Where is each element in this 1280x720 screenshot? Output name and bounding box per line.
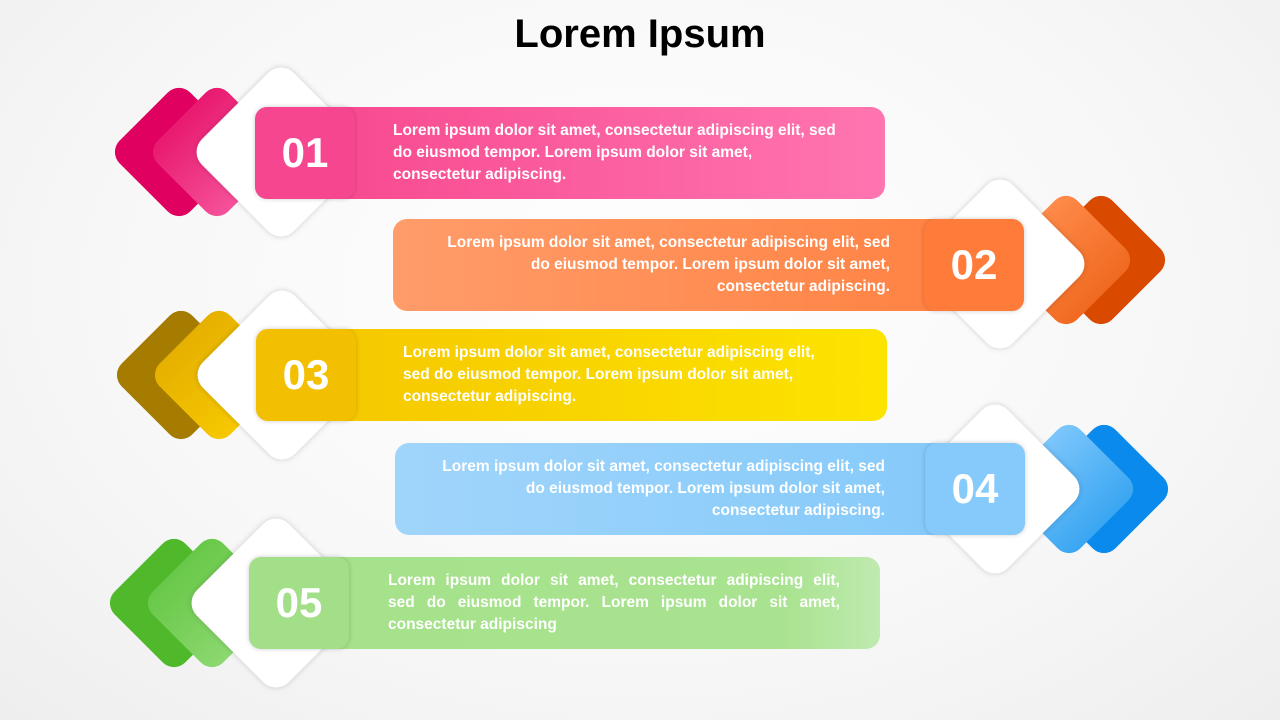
number 03: 03	[283, 351, 329, 398]
bar 3	[256, 329, 887, 421]
row 4	[395, 402, 1168, 576]
text 2: do eiusmod tempor. Lorem ipsum dolor sit amet,	[531, 256, 890, 273]
bar 5	[249, 557, 880, 649]
icon: chevron dark green	[103, 532, 245, 674]
text 3: consectetur adipiscing.	[403, 388, 576, 405]
text 2: consectetur adipiscing.	[717, 278, 890, 295]
text 1: do eiusmod tempor. Lorem ipsum dolor sit amet,	[393, 144, 752, 161]
text 4: Lorem ipsum dolor sit amet, consectetur adipiscing elit, sed	[442, 458, 885, 475]
icon: chevron light yellow	[148, 304, 290, 446]
icon: white diamond	[189, 60, 373, 244]
icon: chevron light pink	[146, 81, 288, 223]
text 5	[388, 572, 840, 633]
icon: chevron dark blue	[1033, 418, 1175, 560]
text 3	[403, 344, 815, 405]
row 5	[110, 516, 880, 690]
number 01	[255, 107, 355, 199]
icon: chevron light orange	[995, 189, 1137, 331]
row 1	[114, 66, 885, 238]
number 05	[249, 557, 349, 649]
text 4: consectetur adipiscing.	[712, 502, 885, 519]
row 3	[116, 288, 887, 462]
text 1: Lorem ipsum dolor sit amet, consectetur adipiscing elit, sed	[393, 122, 836, 139]
row 2	[393, 178, 1166, 350]
number 05: 05	[276, 579, 322, 626]
icon: chevron dark yellow	[110, 304, 252, 446]
number 03	[256, 329, 356, 421]
text 5: consectetur adipiscing	[388, 616, 557, 633]
text 2	[447, 234, 890, 295]
text 5: sed do eiusmod tempor. Lorem ipsum dolor sit amet,	[388, 594, 840, 611]
number 02	[924, 219, 1024, 311]
number 04: 04	[952, 465, 998, 512]
title: Lorem Ipsum	[514, 12, 766, 56]
icon: chevron dark orange	[1030, 189, 1172, 331]
icon: chevron light blue	[998, 418, 1140, 560]
text 4: do eiusmod tempor. Lorem ipsum dolor sit amet,	[526, 480, 885, 497]
number 04	[925, 443, 1025, 535]
icon: white diamond	[190, 283, 374, 467]
number 01: 01	[282, 129, 328, 176]
text 4	[442, 458, 885, 519]
text 3: Lorem ipsum dolor sit amet, consectetur adipiscing elit,	[403, 344, 815, 361]
icon: white diamond	[908, 172, 1092, 356]
bar 1	[255, 107, 885, 199]
icon: white diamond	[184, 511, 368, 695]
text 5: Lorem ipsum dolor sit amet, consectetur adipiscing elit,	[388, 572, 840, 589]
icon: chevron dark pink	[108, 81, 250, 223]
bar 4	[395, 443, 1025, 535]
number 02: 02	[951, 241, 997, 288]
text 1	[393, 122, 836, 183]
text 2: Lorem ipsum dolor sit amet, consectetur adipiscing elit, sed	[447, 234, 890, 251]
text 3: sed do eiusmod tempor. Lorem ipsum dolor sit amet,	[403, 366, 793, 383]
bar 2	[393, 219, 1024, 311]
icon: chevron light green	[141, 532, 283, 674]
icon: white diamond	[903, 397, 1087, 581]
text 1: consectetur adipiscing.	[393, 166, 566, 183]
